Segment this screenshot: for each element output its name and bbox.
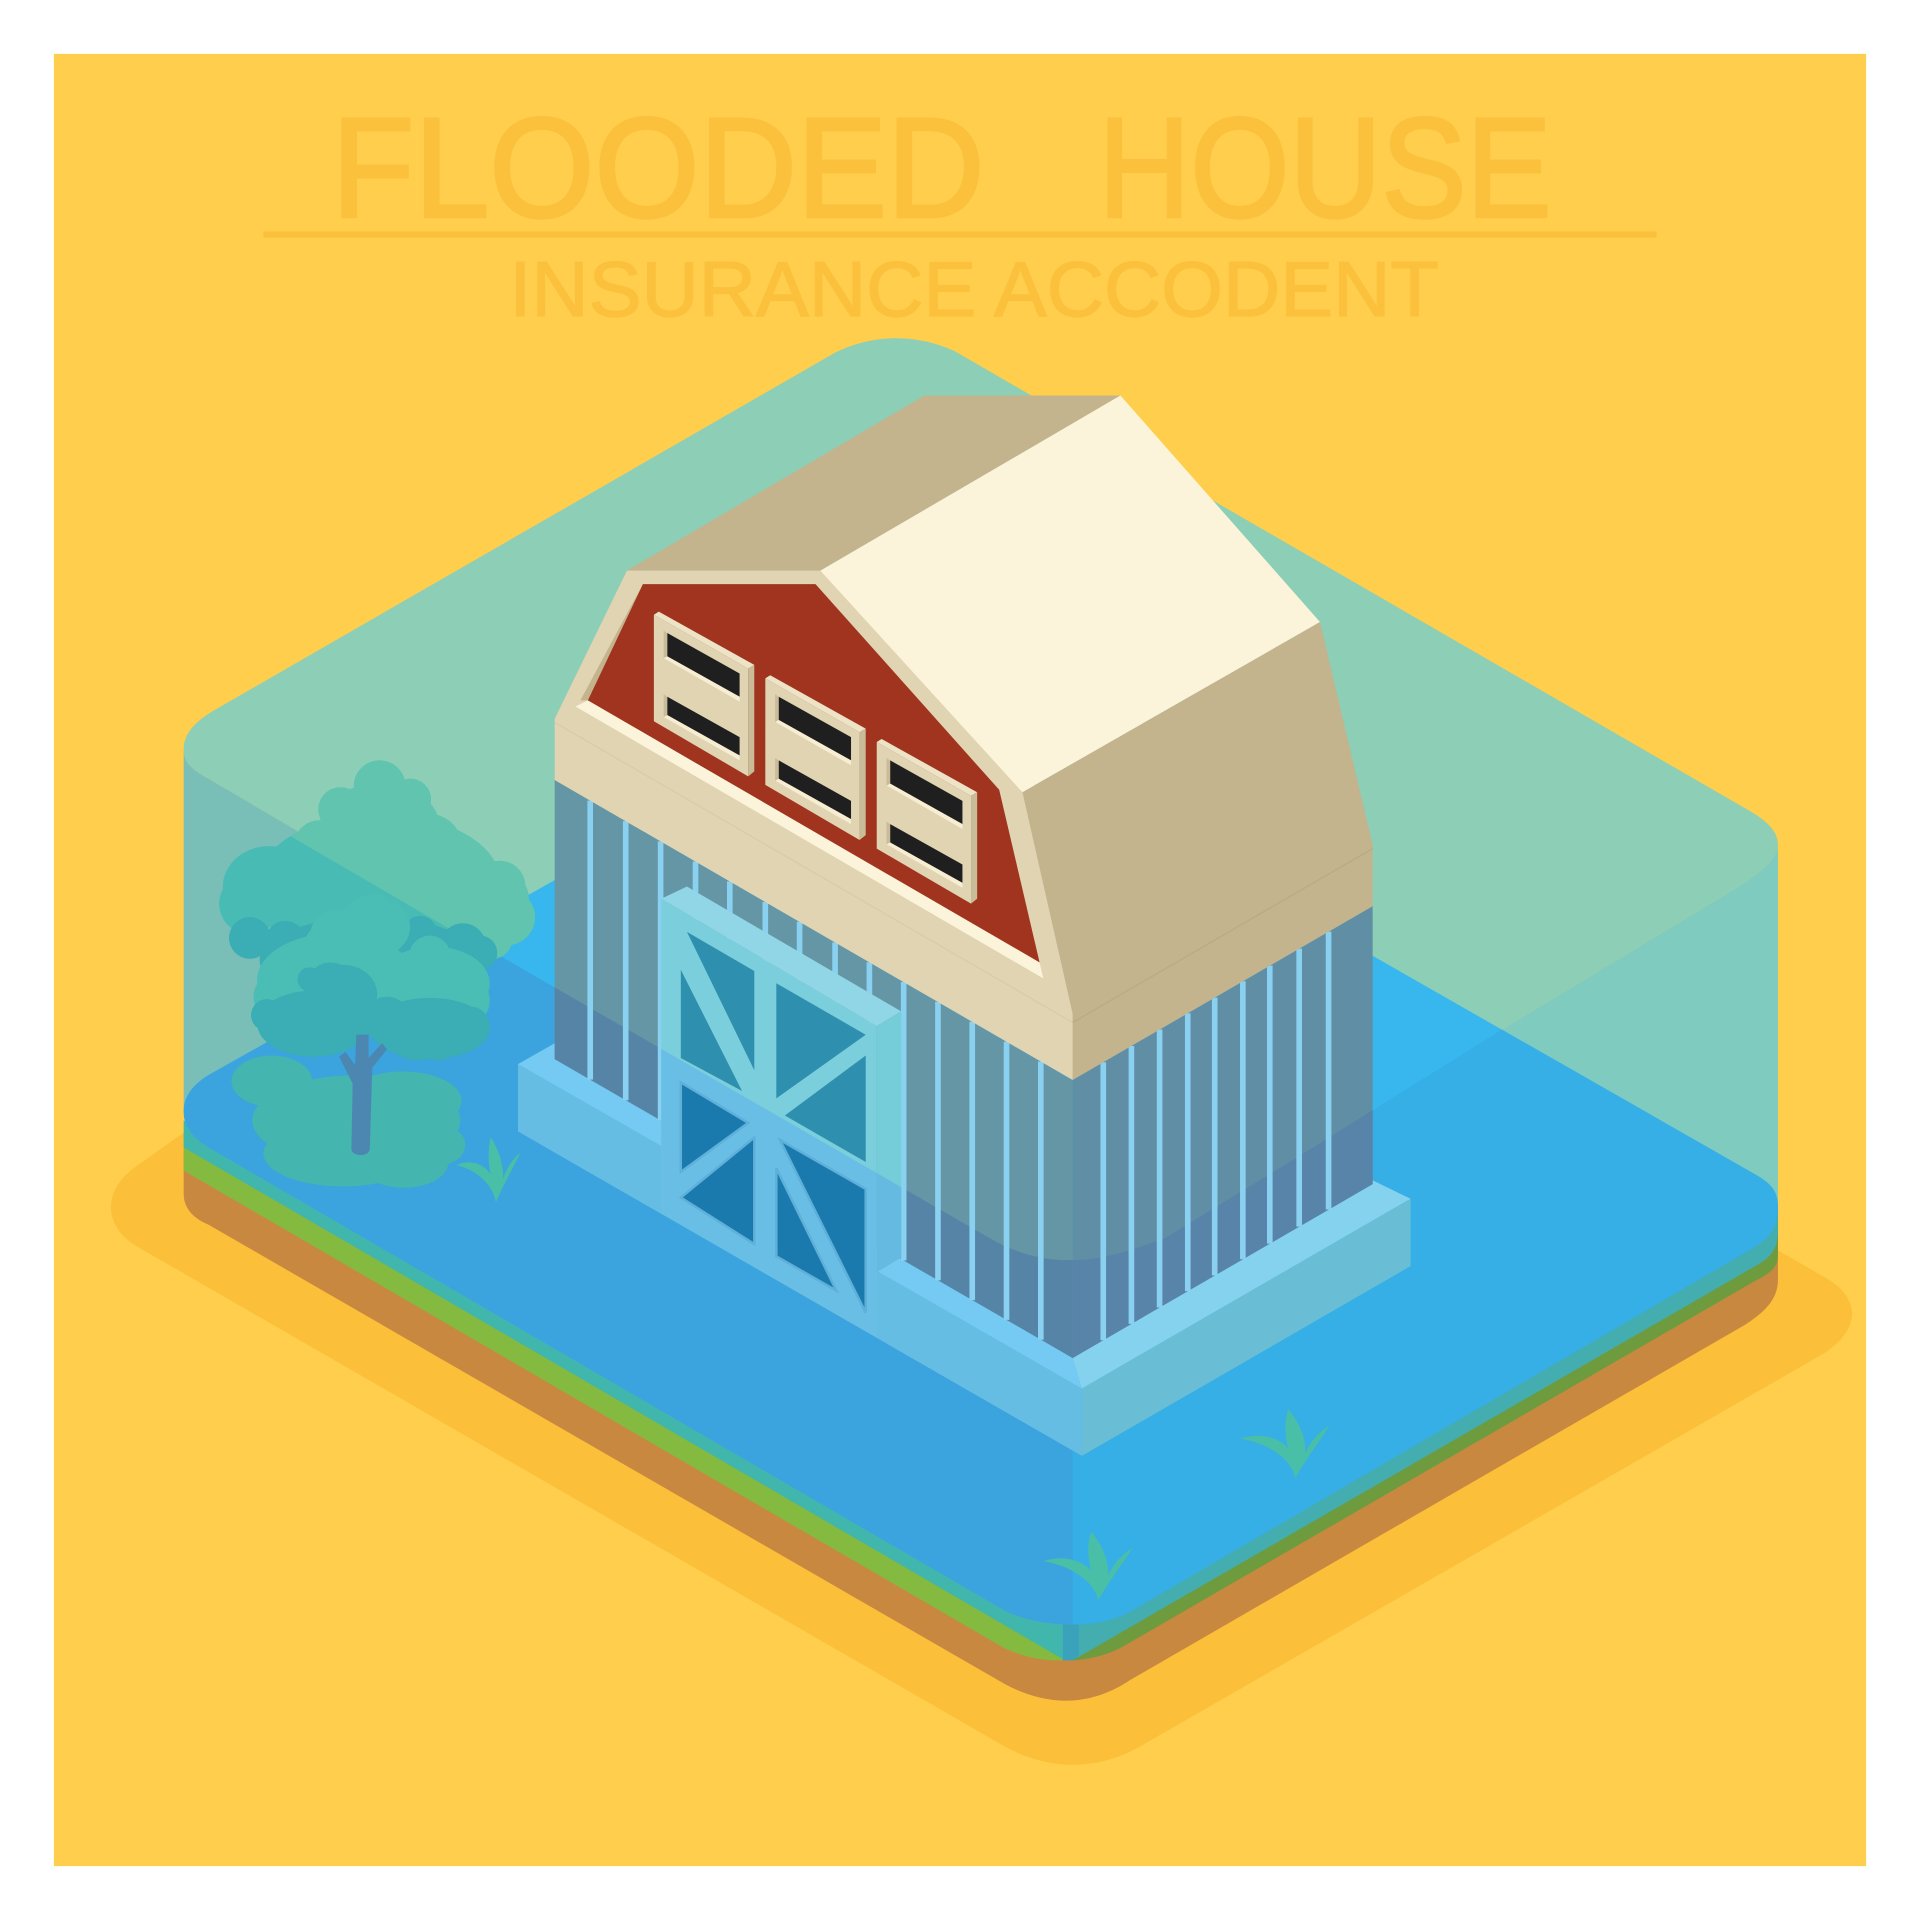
tree crown lower left	[251, 962, 377, 1057]
grass tuft front	[1043, 1532, 1133, 1600]
foundation	[518, 1043, 1411, 1456]
tree crown right bright	[376, 936, 490, 1027]
water right wall	[1469, 845, 1778, 1206]
heading: flooded house: FLOODED	[332, 89, 984, 248]
window 3	[877, 739, 977, 904]
right roof slope	[1022, 622, 1373, 1080]
gable panel shadow	[580, 584, 643, 700]
foundation front face	[518, 1064, 1082, 1456]
flooded ground surface	[184, 774, 1778, 1624]
tree shadow blob	[231, 1056, 465, 1188]
soil layer	[184, 1151, 1778, 1701]
door frame	[661, 899, 877, 1337]
roof	[555, 396, 1373, 1080]
gable eave line	[555, 722, 1073, 1022]
tree trunk	[339, 1035, 387, 1155]
lower door panes	[681, 1082, 866, 1313]
title	[263, 89, 1657, 333]
corner seam	[1063, 1592, 1079, 1660]
heading: flooded house	[332, 89, 1551, 248]
tree	[219, 760, 535, 1188]
flood band right	[1063, 1206, 1778, 1660]
walls	[555, 780, 1373, 1358]
grass layer right	[1073, 1212, 1778, 1660]
tree crown shade	[229, 916, 497, 1003]
submerged door frame	[661, 1049, 902, 1336]
door top face	[661, 887, 901, 1026]
foundation top right	[1073, 1180, 1411, 1389]
right eave line	[1073, 849, 1373, 1022]
water top surface	[184, 338, 1778, 1260]
red gable panel	[588, 584, 1040, 962]
heading: flooded house: HOUSE	[1098, 89, 1551, 248]
right wall	[1073, 906, 1373, 1358]
grass tuft near tree	[456, 1137, 521, 1202]
window 2	[765, 675, 866, 840]
grass tuft right	[1240, 1409, 1330, 1478]
flood band left	[184, 1120, 1073, 1659]
wall planks	[590, 801, 1329, 1340]
title rule	[263, 231, 1657, 238]
top roof slope	[820, 396, 1320, 792]
upper door panes	[681, 932, 866, 1162]
back roof slope	[627, 396, 1120, 571]
tree crown lower right	[364, 997, 490, 1060]
subtitle: INSURANCE ACCODENT	[509, 245, 1439, 333]
ground shadow	[111, 1133, 1852, 1765]
tree crown left bright	[253, 894, 416, 1026]
window 1	[654, 612, 754, 776]
door	[661, 887, 901, 1337]
gable sill	[576, 700, 1043, 978]
gable wall	[555, 571, 1078, 1080]
door side	[877, 1011, 901, 1272]
isometric flooded plot	[111, 338, 1852, 1765]
foundation right face	[1082, 1199, 1411, 1456]
grass layer left	[184, 1133, 1073, 1660]
foundation top left	[518, 1043, 1082, 1389]
left wall	[555, 780, 1073, 1358]
house	[518, 396, 1411, 1456]
submerged wall part	[554, 988, 1373, 1358]
water left wall	[184, 749, 551, 1112]
tree crown back	[219, 760, 535, 960]
